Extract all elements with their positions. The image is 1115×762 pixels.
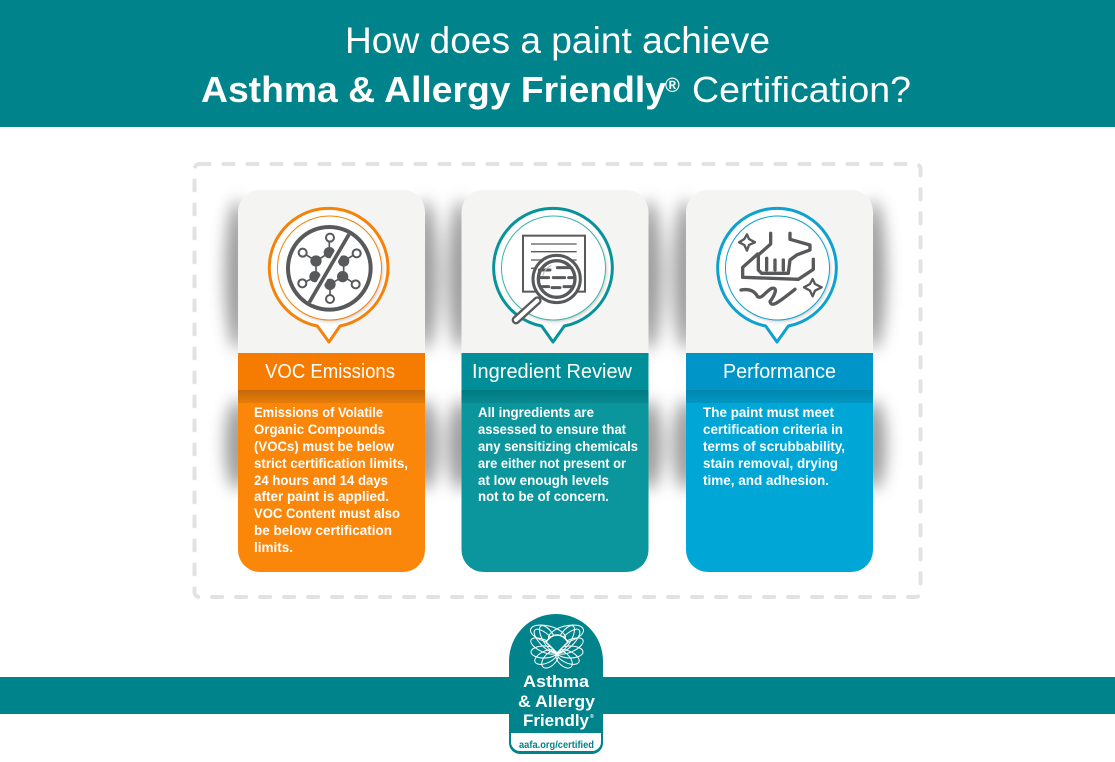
heading: Ingredient Review xyxy=(472,360,632,383)
icon: document under magnifying glass xyxy=(516,236,585,320)
text block: Organic Compounds xyxy=(254,422,385,437)
title: ® xyxy=(665,75,680,97)
logo emblem xyxy=(529,622,585,671)
text block: assessed to ensure that xyxy=(478,422,626,437)
text block xyxy=(703,405,845,488)
icon: speech bubble circle xyxy=(269,208,388,342)
text block xyxy=(478,405,638,504)
text block: time, and adhesion. xyxy=(703,473,829,488)
text block: be below certification xyxy=(254,523,392,538)
heading: Performance xyxy=(723,360,836,383)
title: Certification? xyxy=(692,69,911,110)
text block: after paint is applied. xyxy=(254,489,389,504)
logo text: & Allergy xyxy=(518,693,596,711)
text block: certification criteria in xyxy=(703,422,843,437)
title: Asthma & Allergy Friendly xyxy=(201,69,666,110)
title xyxy=(201,20,911,110)
icon: speech bubble circle xyxy=(718,208,836,342)
text block: not to be of concern. xyxy=(478,489,609,504)
logo url: aafa.org/certified xyxy=(519,740,594,751)
icon: crossed-out molecule xyxy=(288,227,371,310)
text block: at low enough levels xyxy=(478,473,609,488)
text block xyxy=(254,405,408,555)
header banner xyxy=(0,0,1115,127)
text block: Emissions of Volatile xyxy=(254,405,383,420)
dashed frame xyxy=(194,164,920,597)
text block: (VOCs) must be below xyxy=(254,439,394,454)
text block: are either not present or xyxy=(478,456,627,471)
logo text: ® xyxy=(590,713,594,720)
text block: 24 hours and 14 days xyxy=(254,473,388,488)
text block: limits. xyxy=(254,540,293,555)
card body xyxy=(238,190,425,572)
logo text: Asthma xyxy=(523,673,590,691)
text block: All ingredients are xyxy=(478,405,594,420)
text block: any sensitizing chemicals xyxy=(478,439,638,454)
heading: VOC Emissions xyxy=(265,360,395,383)
panel: Ingredient Review xyxy=(461,190,649,572)
panel: Performance xyxy=(686,190,873,572)
text block: VOC Content must also xyxy=(254,506,400,521)
footer band xyxy=(0,677,1115,714)
card shadows xyxy=(225,200,886,490)
text block: The paint must meet xyxy=(703,405,834,420)
card body xyxy=(461,190,649,572)
card body xyxy=(686,190,873,572)
panel: VOC Emissions xyxy=(238,190,425,572)
logo text xyxy=(518,673,596,730)
icon: speech bubble circle xyxy=(494,208,612,342)
text block: stain removal, drying xyxy=(703,456,838,471)
icon: hand scrubbing with sparkles xyxy=(739,233,822,304)
title: How does a paint achieve xyxy=(345,20,770,61)
text block: strict certification limits, xyxy=(254,456,408,471)
text block: terms of scrubbability, xyxy=(703,439,845,454)
logo badge: Asthma & Allergy Friendly xyxy=(509,614,603,754)
logo text: Friendly xyxy=(523,712,590,730)
